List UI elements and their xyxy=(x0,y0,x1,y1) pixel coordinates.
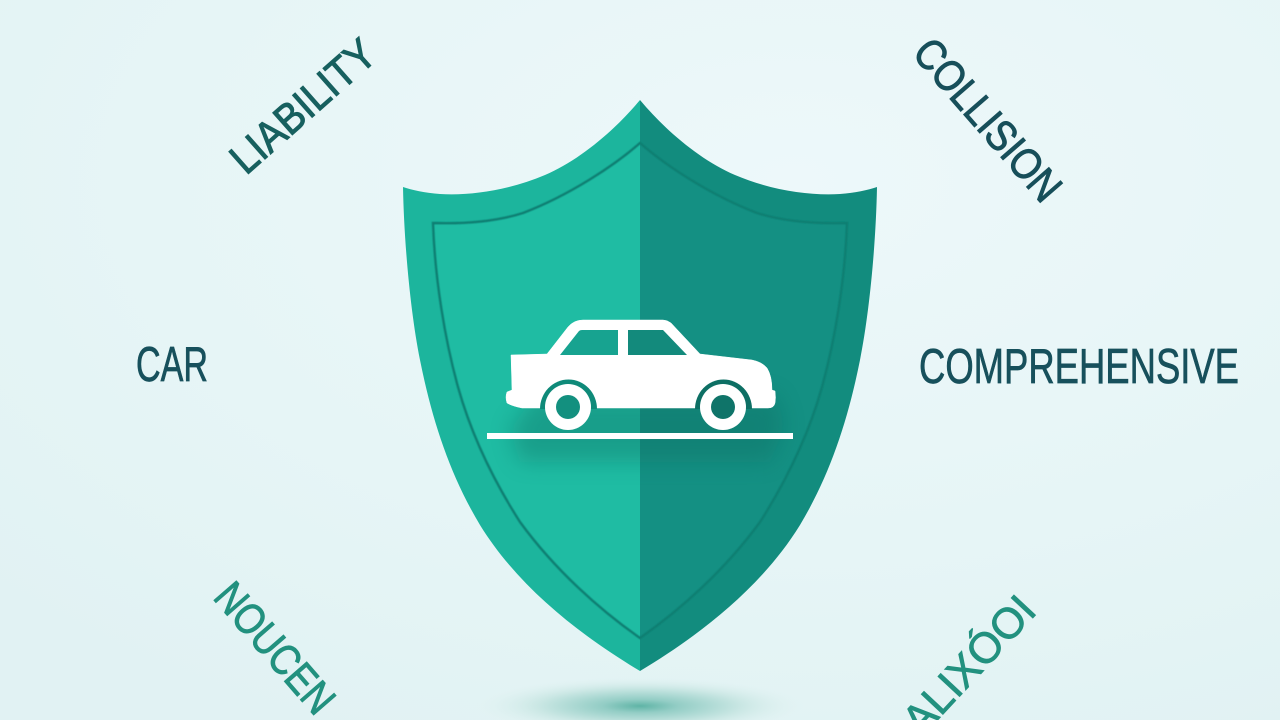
label: car: CAR xyxy=(136,338,208,392)
label: collision: COLLISION xyxy=(903,29,1071,212)
icon: car shadow xyxy=(510,395,785,462)
left wheel xyxy=(540,379,597,409)
icon: car xyxy=(506,320,776,430)
icon: shield xyxy=(403,100,877,671)
right wheel xyxy=(695,380,752,409)
shield inner outline xyxy=(433,143,847,638)
car body xyxy=(506,320,776,408)
label: liability: LIABILITY xyxy=(221,30,386,183)
ground shadow xyxy=(470,676,810,720)
road line xyxy=(487,433,793,439)
windows xyxy=(560,330,618,355)
